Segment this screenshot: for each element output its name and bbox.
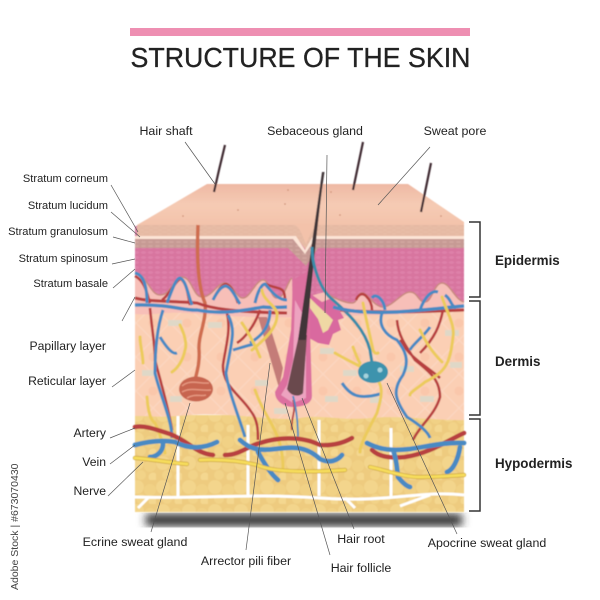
bracket labels: Epidermis (495, 253, 560, 268)
arrector pili fiber (258, 317, 283, 388)
sweat duct: apocrine (312, 247, 372, 365)
bracket labels (495, 253, 572, 471)
labels: left: Nerve (73, 484, 106, 498)
labels: left (8, 173, 108, 498)
labels: left: Artery (73, 426, 107, 440)
artery (135, 427, 464, 457)
labels: left: Vein (82, 455, 106, 469)
labels: top (139, 124, 486, 138)
hypodermis vessels (135, 427, 464, 487)
labels: left: Stratum spinosum (19, 253, 108, 265)
labels: left: Stratum lucidum (28, 200, 108, 212)
nerves (140, 290, 453, 468)
stratum lucidum (135, 236, 464, 254)
stratum granulosum (135, 239, 464, 266)
ground shadow (146, 514, 462, 526)
labels: bottom (83, 532, 546, 575)
labels: bottom: Ecrine sweat gland (83, 535, 187, 549)
skin surface (137, 184, 464, 226)
skin dimple at hair exit (294, 225, 319, 244)
title: STRUCTURE OF THE SKIN (130, 42, 470, 73)
title accent bar (130, 28, 470, 36)
stratum corneum (137, 222, 464, 250)
labels: left: Stratum basale (33, 278, 108, 290)
labels: bottom: Hair follicle (331, 561, 391, 575)
stratum basale outline (135, 273, 464, 307)
illustration: skin cross-section (135, 142, 464, 526)
dermis (135, 300, 464, 420)
epidermis stratum spinosum (135, 226, 464, 330)
dermis connective tissue patches (142, 320, 462, 414)
labels: top: Hair shaft (139, 124, 193, 138)
labels: top: Sebaceous gland (267, 124, 363, 138)
labels: left: Papillary layer (29, 339, 106, 353)
hair shaft (298, 172, 324, 340)
bracket labels: Dermis (495, 354, 540, 369)
labels: bottom: Arrector pili fiber (201, 554, 291, 568)
stock id: Adobe Stock | #673070430 (9, 463, 21, 590)
eccrine sweat gland (179, 376, 213, 402)
leader lines (108, 142, 457, 555)
labels: left: Stratum granulosum (8, 226, 108, 238)
hair follicle (275, 270, 312, 407)
layer brackets (469, 222, 480, 511)
arteries (135, 276, 464, 440)
bracket labels: Hypodermis (495, 456, 572, 471)
apocrine sweat gland (358, 361, 388, 383)
sebaceous gland (307, 292, 344, 345)
papillary layer (135, 270, 464, 317)
hair root (287, 335, 307, 396)
labels: left: Reticular layer (28, 374, 106, 388)
nerve (135, 458, 464, 477)
labels: left: Stratum corneum (23, 173, 108, 185)
labels: top: Sweat pore (424, 124, 486, 138)
vein (135, 440, 464, 487)
veins (135, 273, 464, 440)
sweat duct: eccrine (195, 225, 205, 380)
surface hairs (214, 142, 431, 212)
labels: bottom: Apocrine sweat gland (428, 536, 546, 550)
hypodermis (135, 415, 464, 512)
labels: bottom: Hair root (337, 532, 385, 546)
surface pores (182, 189, 442, 217)
